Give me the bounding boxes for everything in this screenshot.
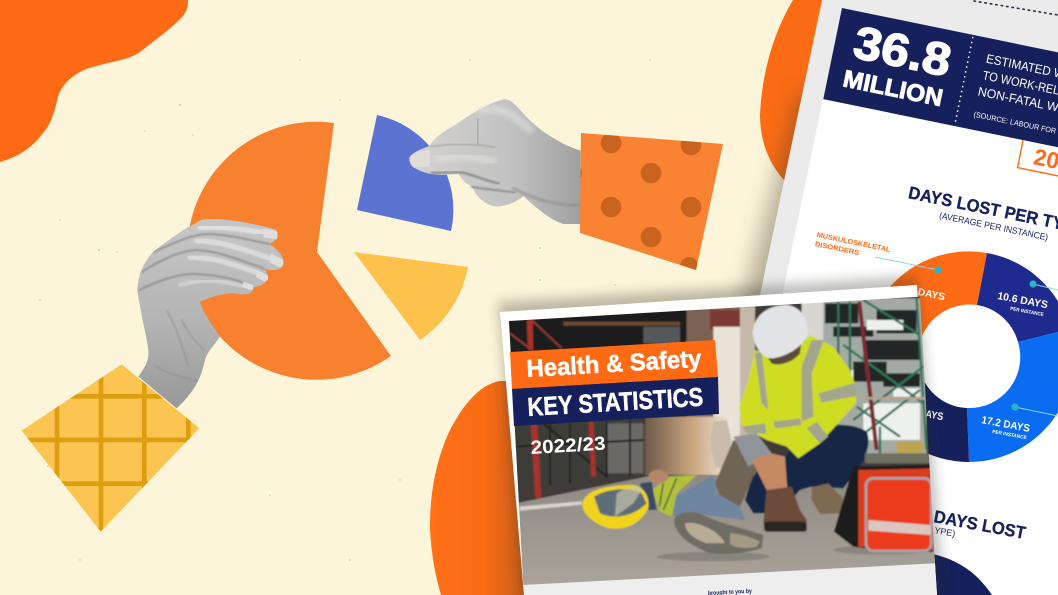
million: MILLION <box>841 65 945 112</box>
donut: indigo segment <box>977 253 1058 342</box>
casualty: hand <box>648 470 668 483</box>
finger nails <box>243 228 283 290</box>
blob: right orange <box>760 0 860 186</box>
thumb nail <box>409 150 430 167</box>
label: musculoskeletal: MUSKULOSKELETAL <box>816 232 892 254</box>
donut chart <box>864 251 1058 462</box>
donut label: orange: 2 DAYS <box>908 285 946 303</box>
report cover <box>500 285 940 595</box>
jacket reflective strips <box>742 340 856 443</box>
page: dotted top rule <box>974 1 1058 15</box>
cover: photo of first aid on a construction site <box>500 290 940 595</box>
sleeve: yellow checked cuff <box>22 364 200 532</box>
pie: yellow slice <box>354 252 468 340</box>
cover: title: Health & Safety <box>526 346 702 383</box>
cover: white sheet <box>500 285 937 595</box>
cover: year: 2022/23 <box>530 434 606 459</box>
kneeling worker: trousers <box>745 425 869 513</box>
pie chart pieces <box>187 115 468 380</box>
photo base <box>514 296 930 504</box>
year box <box>1018 140 1058 188</box>
pie: blue slice <box>357 115 453 231</box>
casualty: raised leg trousers <box>714 440 758 506</box>
banner description: (SOURCE: LABOUR FOR <box>973 110 1057 136</box>
cover: orange title band <box>510 340 718 389</box>
red frame <box>710 310 740 330</box>
first aid bag <box>834 465 933 552</box>
blob: lower orange <box>430 381 530 595</box>
subheading: (AVERAGE PER INSTANCE) <box>938 210 1049 242</box>
page: grey sheet <box>697 0 1058 595</box>
donut label: navy: AYS <box>924 408 944 423</box>
hand: right, holding the blue slice <box>409 99 581 224</box>
report page: statistics sheet <box>697 0 1058 595</box>
right scaffold background <box>823 298 927 455</box>
banner description <box>972 51 1058 136</box>
hand: left, holding the orange slice <box>137 219 284 408</box>
donut label: 17.2 days: 17.2 DAYS <box>980 414 1031 435</box>
donut: navy segment <box>874 379 969 462</box>
pie: large orange slice <box>187 122 391 380</box>
yellow hard hat on the floor <box>582 485 649 529</box>
paper speckles <box>39 59 721 561</box>
kneeling worker: jacket <box>739 335 856 458</box>
lit window <box>712 325 742 444</box>
banner divider <box>955 37 973 125</box>
per instance: PER INSTANCE <box>1010 306 1045 318</box>
big number: 36.8 <box>849 16 956 86</box>
cover: navy title band <box>512 377 719 426</box>
blob: top-left orange <box>0 0 188 162</box>
hand shading <box>431 109 580 205</box>
page: white body <box>720 99 1058 595</box>
shadow: report page <box>735 90 860 330</box>
floor shadows <box>657 552 770 561</box>
central wall <box>687 307 743 423</box>
leader dots <box>934 266 1037 411</box>
background figure <box>710 420 732 470</box>
page: headline banner <box>823 8 1058 159</box>
kneeling worker: helmet <box>768 344 802 366</box>
donut label: 10.6 days: 10.6 DAYS <box>996 290 1049 311</box>
hand silhouette <box>137 219 284 408</box>
lower scaffold wall <box>562 418 644 424</box>
casualty: shin <box>752 453 787 490</box>
casualty: jeans <box>673 475 745 520</box>
pillar <box>740 307 755 440</box>
heading: days lost: DAYS LOST <box>932 506 1028 543</box>
floor <box>517 470 940 587</box>
warm wall with glow <box>645 417 732 475</box>
red poles <box>527 320 596 498</box>
shadow: cover <box>498 276 944 595</box>
casualty: front boot <box>763 487 807 532</box>
per instance: PER INSTANCE <box>992 429 1028 441</box>
leader lines <box>875 257 1058 416</box>
casualty: boot sole <box>674 512 763 554</box>
donut: bright blue segment <box>967 329 1058 462</box>
second chart: navy circle <box>925 553 992 595</box>
kneeling worker: rear boot <box>812 483 843 514</box>
label: disorders: DISORDERS <box>814 241 860 257</box>
cover: footer band <box>523 563 937 595</box>
page: year box and chart headings <box>814 103 1058 305</box>
finger shading <box>139 227 273 380</box>
hand silhouette <box>409 99 581 224</box>
back wall left <box>507 303 687 423</box>
cover: key statistics: KEY STATISTICS <box>527 382 704 422</box>
casualty: vest <box>652 475 697 517</box>
donut: orange segment <box>864 251 987 402</box>
sleeve: orange dotted cuff <box>580 133 723 270</box>
subheading: type: YPE) <box>934 525 956 539</box>
